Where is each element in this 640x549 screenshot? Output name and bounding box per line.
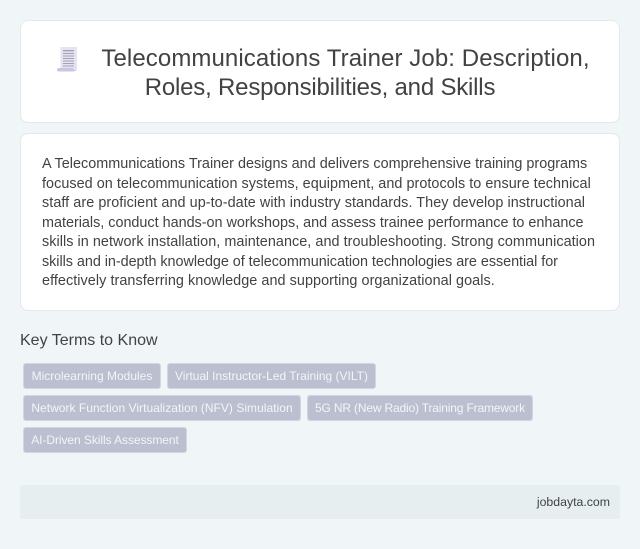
heading: key terms: Key Terms to Know xyxy=(20,332,158,349)
text block: description: effectively transferring knowledge and supporting organizational goals. xyxy=(42,273,495,289)
panel: title card xyxy=(20,20,620,123)
tag: 5G xyxy=(307,395,533,421)
text block: description: skills and in-depth knowledge of telecommunication technologies are essential for xyxy=(42,254,558,270)
tag: 5G: 5G NR (New Radio) Training Framework xyxy=(315,401,525,415)
text block: description: A Telecommunications Trainer designs and delivers comprehensive training programs xyxy=(42,156,587,172)
tag list xyxy=(23,363,533,453)
text block: description xyxy=(42,156,595,289)
text block: description: materials, conduct hands-on workshops, and assess trainee performance to enhance xyxy=(42,214,584,230)
icon: paper scroll document xyxy=(57,47,77,72)
text block: description: skills in network installation, maintenance, and troubleshooting. Strong communication xyxy=(42,234,595,250)
tag: VILT: Virtual Instructor-Led Training (VILT) xyxy=(175,369,368,383)
text block: description: focused on telecommunication systems, equipment, and protocols to ensure technical xyxy=(42,176,591,192)
panel: description card xyxy=(20,133,620,311)
tag: microlearning: Microlearning Modules xyxy=(32,369,152,383)
title: Telecommunications Trainer Job: Description, xyxy=(101,45,590,72)
tag: VILT xyxy=(167,363,376,389)
title xyxy=(101,45,590,101)
tag: AI: AI-Driven Skills Assessment xyxy=(31,433,179,447)
footer: site name: jobdayta.com xyxy=(537,495,610,509)
text block: description: staff are proficient and up-to-date with industry standards. They develop instructional xyxy=(42,195,585,211)
tag: NFV: Network Function Virtualization (NFV) Simulation xyxy=(31,401,293,415)
tag: NFV xyxy=(23,395,301,421)
footer bar xyxy=(20,485,620,519)
tag: AI xyxy=(23,427,187,453)
tag: microlearning xyxy=(23,363,161,389)
title: Roles, Responsibilities, and Skills xyxy=(145,74,495,101)
